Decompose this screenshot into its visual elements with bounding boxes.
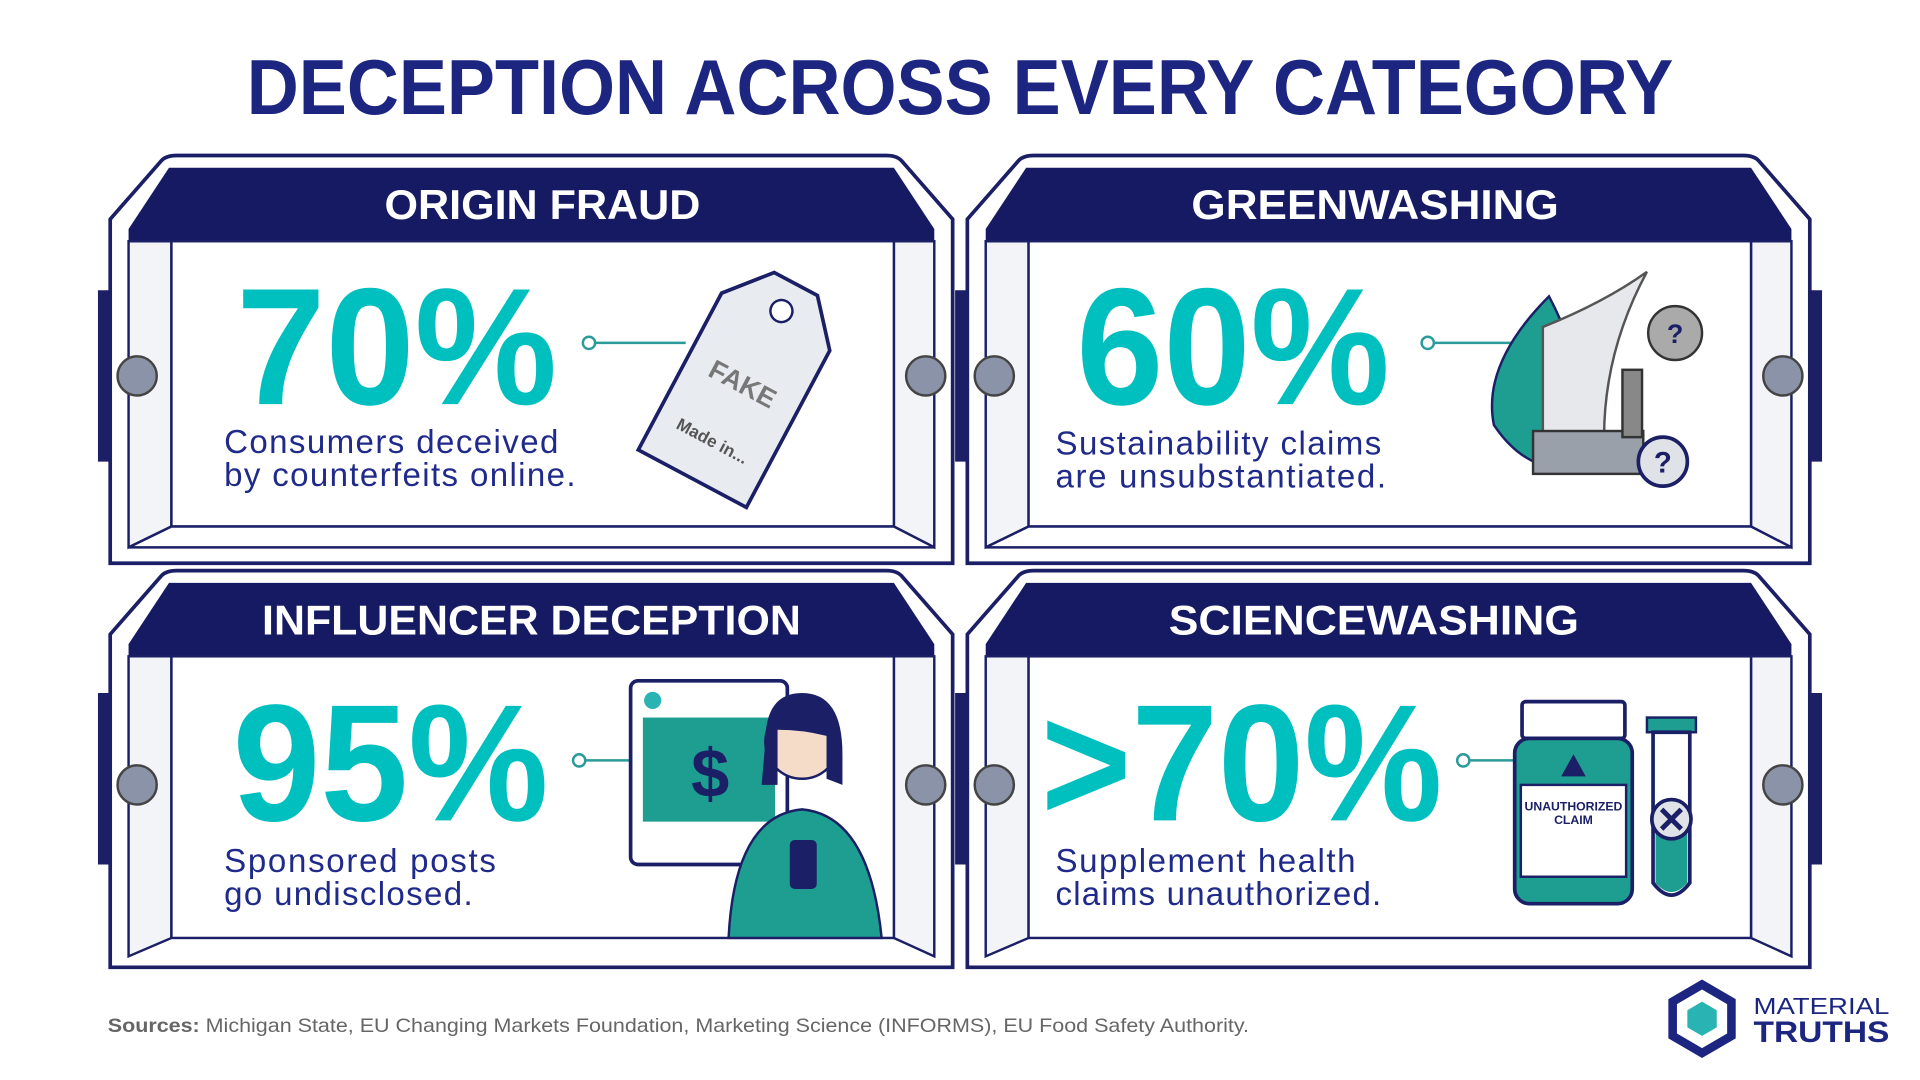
icon: supplement bottle and test tube: UNAUTHORIZED [1525,800,1623,814]
title: DECEPTION ACROSS EVERY CATEGORY [247,43,1673,131]
description: Sustainability claims [1056,425,1381,462]
icon: fake tag [638,255,850,507]
stat: >70% [1041,670,1442,856]
panel: origin fraud [98,156,953,563]
heading: GREENWASHING [1191,181,1559,228]
icon: leaf and factory: ? [1654,447,1672,480]
description: Supplement health [1056,843,1356,880]
connector [573,754,631,767]
panel: sciencewashing [955,571,1822,967]
icon: leaf and factory [1492,272,1702,486]
icon: fake tag: Made in... [673,414,752,468]
icon: supplement bottle and test tube: CLAIM [1554,813,1593,827]
logo: MATERIAL [1753,993,1889,1019]
description: claims unauthorized. [1056,876,1381,913]
icon: fake tag: FAKE [704,354,781,414]
connector [583,337,686,349]
description: Sponsored posts [224,843,496,880]
stat: 60% [1076,254,1390,440]
icon: social post and influencer: $ [691,735,729,812]
panel: greenwashing [955,156,1822,563]
icon: supplement bottle and test tube [1515,702,1696,904]
description: by counterfeits online. [224,457,576,494]
heading: ORIGIN FRAUD [384,181,700,228]
description: go undisclosed. [224,876,473,913]
panel: influencer deception [98,571,953,967]
connector [1422,337,1518,349]
heading: SCIENCEWASHING [1169,596,1579,643]
icon: leaf and factory: ? [1667,319,1683,349]
sources: Sources: Michigan State, EU Changing Markets Foundation, Marketing Science (INFORMS), EU Food Safety Authority. [108,1015,1249,1037]
description: are unsubstantiated. [1056,458,1386,495]
stat: 70% [236,254,557,440]
connector [1457,754,1516,767]
icon: social post and influencer [631,681,882,938]
logo: TRUTHS [1753,1016,1889,1049]
logo [1673,984,1889,1053]
stat: 95% [233,670,549,856]
description: Consumers deceived [224,424,558,461]
heading: INFLUENCER DECEPTION [262,596,801,643]
